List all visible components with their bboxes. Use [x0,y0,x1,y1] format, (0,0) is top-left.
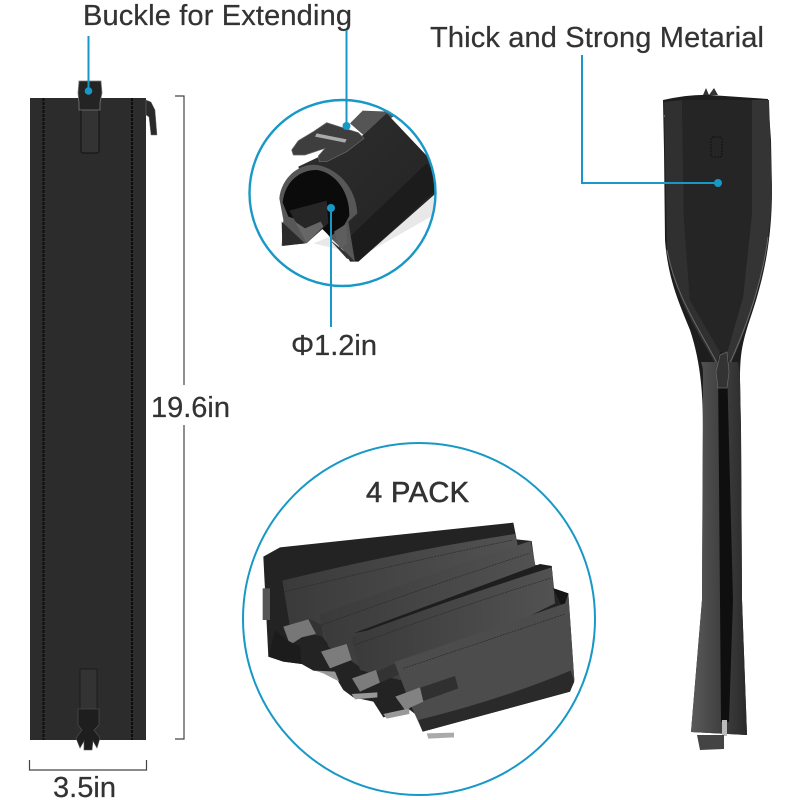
sleeve 4 bottom band [418,671,574,732]
sleeve body [30,98,146,740]
zipper slider [716,352,729,388]
inner webbing [295,222,323,243]
callout: buckle pointer [85,36,92,95]
zipper teeth [718,364,733,722]
patch [711,137,722,157]
strap [350,111,393,135]
zipper 3 [383,708,409,719]
zipper pull [146,100,157,135]
sleeve 1 rim [268,630,302,664]
tube opening [283,170,349,237]
sleeve 4 [394,593,574,732]
dimension: height bracket [175,96,184,739]
circle outline [250,100,436,286]
dimension label: diameter: Φ1.2in [291,330,377,362]
zipper 4 [427,733,454,739]
sleeve 3 [351,567,555,680]
zipper 2 [352,692,377,699]
buckle highlight [315,133,347,143]
right lip [332,242,355,262]
buckle 1 strap [308,618,323,637]
buckle 2 [321,644,352,668]
stacked sleeves [263,523,574,739]
strap 4 [418,676,458,702]
dimension label: 19.6in: 19.6in [151,392,230,424]
heading: Thick and Strong Metarial: Thick and Strong Metarial [430,22,764,54]
end cap [697,735,724,750]
panel: opened sleeve [663,88,772,750]
back buckle teeth [263,588,270,620]
zipper 1 [315,671,339,682]
callout: buckle for extending pointer [342,30,350,130]
left lip [282,222,305,246]
sleeve 2 [319,541,537,677]
bottom strap [80,669,97,714]
buckle [292,123,364,162]
inner panel [682,100,752,353]
callout: diameter pointer [327,204,335,327]
top buckle [78,81,102,110]
left seam [664,100,720,365]
bottom stop [722,720,727,736]
strap 3 [377,663,402,683]
lower tube [691,362,747,735]
circle fill [250,100,436,286]
outer silhouette [663,95,772,735]
silhouette base [263,523,574,732]
inner flap [289,201,328,243]
sleeve 3 rim [353,564,554,633]
panel: tube detail circle [250,100,443,286]
buckle 3 [352,670,380,692]
buckle 4 [395,687,423,710]
buckle 1 [283,619,316,645]
bottom buckle [76,709,100,750]
top strap [81,106,99,153]
zipper edges [667,237,768,365]
sleeve 4 rim [553,588,568,617]
panel: flat sleeve [30,81,157,750]
lower tube fold [351,164,434,262]
top tabs [703,88,718,95]
sleeve 1 [282,534,520,660]
tube rim [279,165,357,262]
panel: 4 pack circle [243,443,595,795]
soft shadow [314,195,434,250]
right seam [727,100,772,365]
tube body [298,113,443,262]
heading: 4 PACK: 4 PACK [366,477,470,509]
heading: Buckle for Extending: Buckle for Extending [83,0,352,32]
dimension: width bracket [30,760,146,770]
top white notches [664,108,769,117]
circle outline [243,443,595,795]
tube product [279,111,443,262]
stitch lines [44,98,132,740]
callout: material pointer [582,55,722,187]
